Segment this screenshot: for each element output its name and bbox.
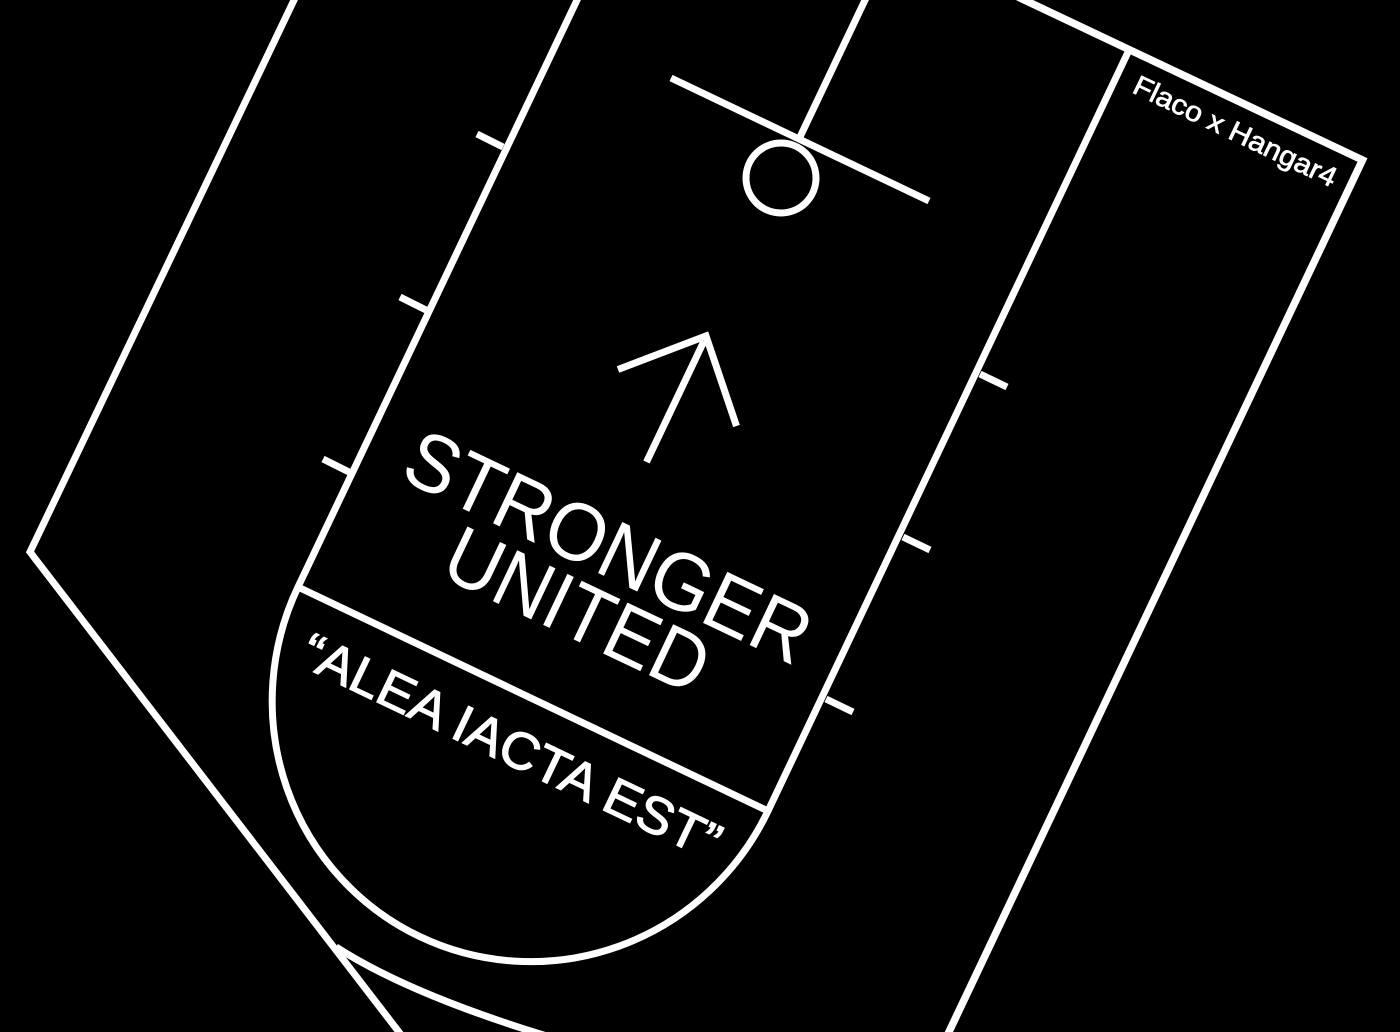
free-throw lane with semicircle <box>272 0 1130 962</box>
backboard and post <box>671 0 929 201</box>
court right boundary and baseline <box>947 0 1362 1032</box>
court outer sideline and corner <box>30 0 402 1032</box>
quote: “ALEA IACTA EST” <box>292 622 730 872</box>
credit: Flaco x Hangar4 <box>1128 69 1342 193</box>
lower three-point curve <box>336 947 560 1032</box>
title: STRONGER <box>390 412 826 683</box>
free-throw line <box>298 587 768 811</box>
title: UNITED <box>430 509 724 712</box>
lane tick marks <box>323 134 1007 712</box>
hoop <box>746 143 816 213</box>
icon: arrow pointing to hoop <box>618 336 736 462</box>
